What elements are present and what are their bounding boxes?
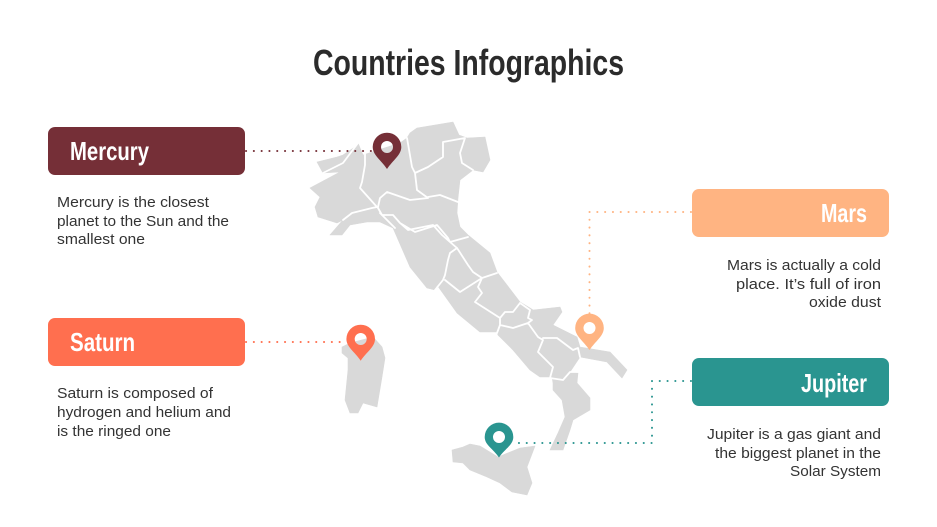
panel: Jupiter xyxy=(692,358,889,480)
Jupiter heading: Jupiter xyxy=(801,368,867,398)
Jupiter description: Jupiter is a gas giant and xyxy=(707,426,881,443)
Mars description xyxy=(727,257,882,311)
Saturn description: Saturn is composed of xyxy=(57,385,214,402)
regional borders xyxy=(323,138,580,380)
Saturn heading: Saturn xyxy=(70,327,135,357)
connector: Mercury xyxy=(246,150,373,152)
Saturn description: is the ringed one xyxy=(57,423,171,440)
Saturn label bar xyxy=(48,318,245,366)
title: Countries Infographics xyxy=(313,42,624,83)
Mercury label bar xyxy=(48,127,245,175)
Mars label bar xyxy=(692,189,889,237)
Mercury description: Mercury is the closest xyxy=(57,194,210,211)
Jupiter label bar xyxy=(692,358,889,406)
Jupiter description xyxy=(707,426,881,480)
map of Italy xyxy=(310,122,627,495)
connector: Jupiter xyxy=(518,381,691,443)
mainland silhouette xyxy=(310,122,627,450)
Mars description: place. It’s full of iron xyxy=(736,276,881,293)
Mars description: oxide dust xyxy=(809,294,882,311)
pin: Jupiter xyxy=(485,423,513,458)
Saturn description xyxy=(57,385,231,440)
pin: Mars xyxy=(575,314,604,350)
connector: Mars xyxy=(590,212,691,314)
Mercury description: planet to the Sun and the xyxy=(57,213,229,230)
Sicily xyxy=(452,444,535,495)
connector: Saturn xyxy=(246,341,346,343)
Mercury description: smallest one xyxy=(57,231,145,248)
Sardinia xyxy=(342,337,385,413)
Jupiter description: Solar System xyxy=(790,463,881,480)
Mars description: Mars is actually a cold xyxy=(727,257,881,274)
Mars heading: Mars xyxy=(821,198,867,228)
pin: Saturn xyxy=(346,325,375,361)
Mercury description xyxy=(57,194,229,248)
Mercury heading: Mercury xyxy=(70,136,149,166)
Jupiter description: the biggest planet in the xyxy=(715,445,881,462)
panel: Mercury xyxy=(48,127,245,248)
panel: Mars xyxy=(692,189,889,311)
Saturn description: hydrogen and helium and xyxy=(57,404,231,421)
pin: Mercury xyxy=(373,133,401,169)
panel: Saturn xyxy=(48,318,245,440)
